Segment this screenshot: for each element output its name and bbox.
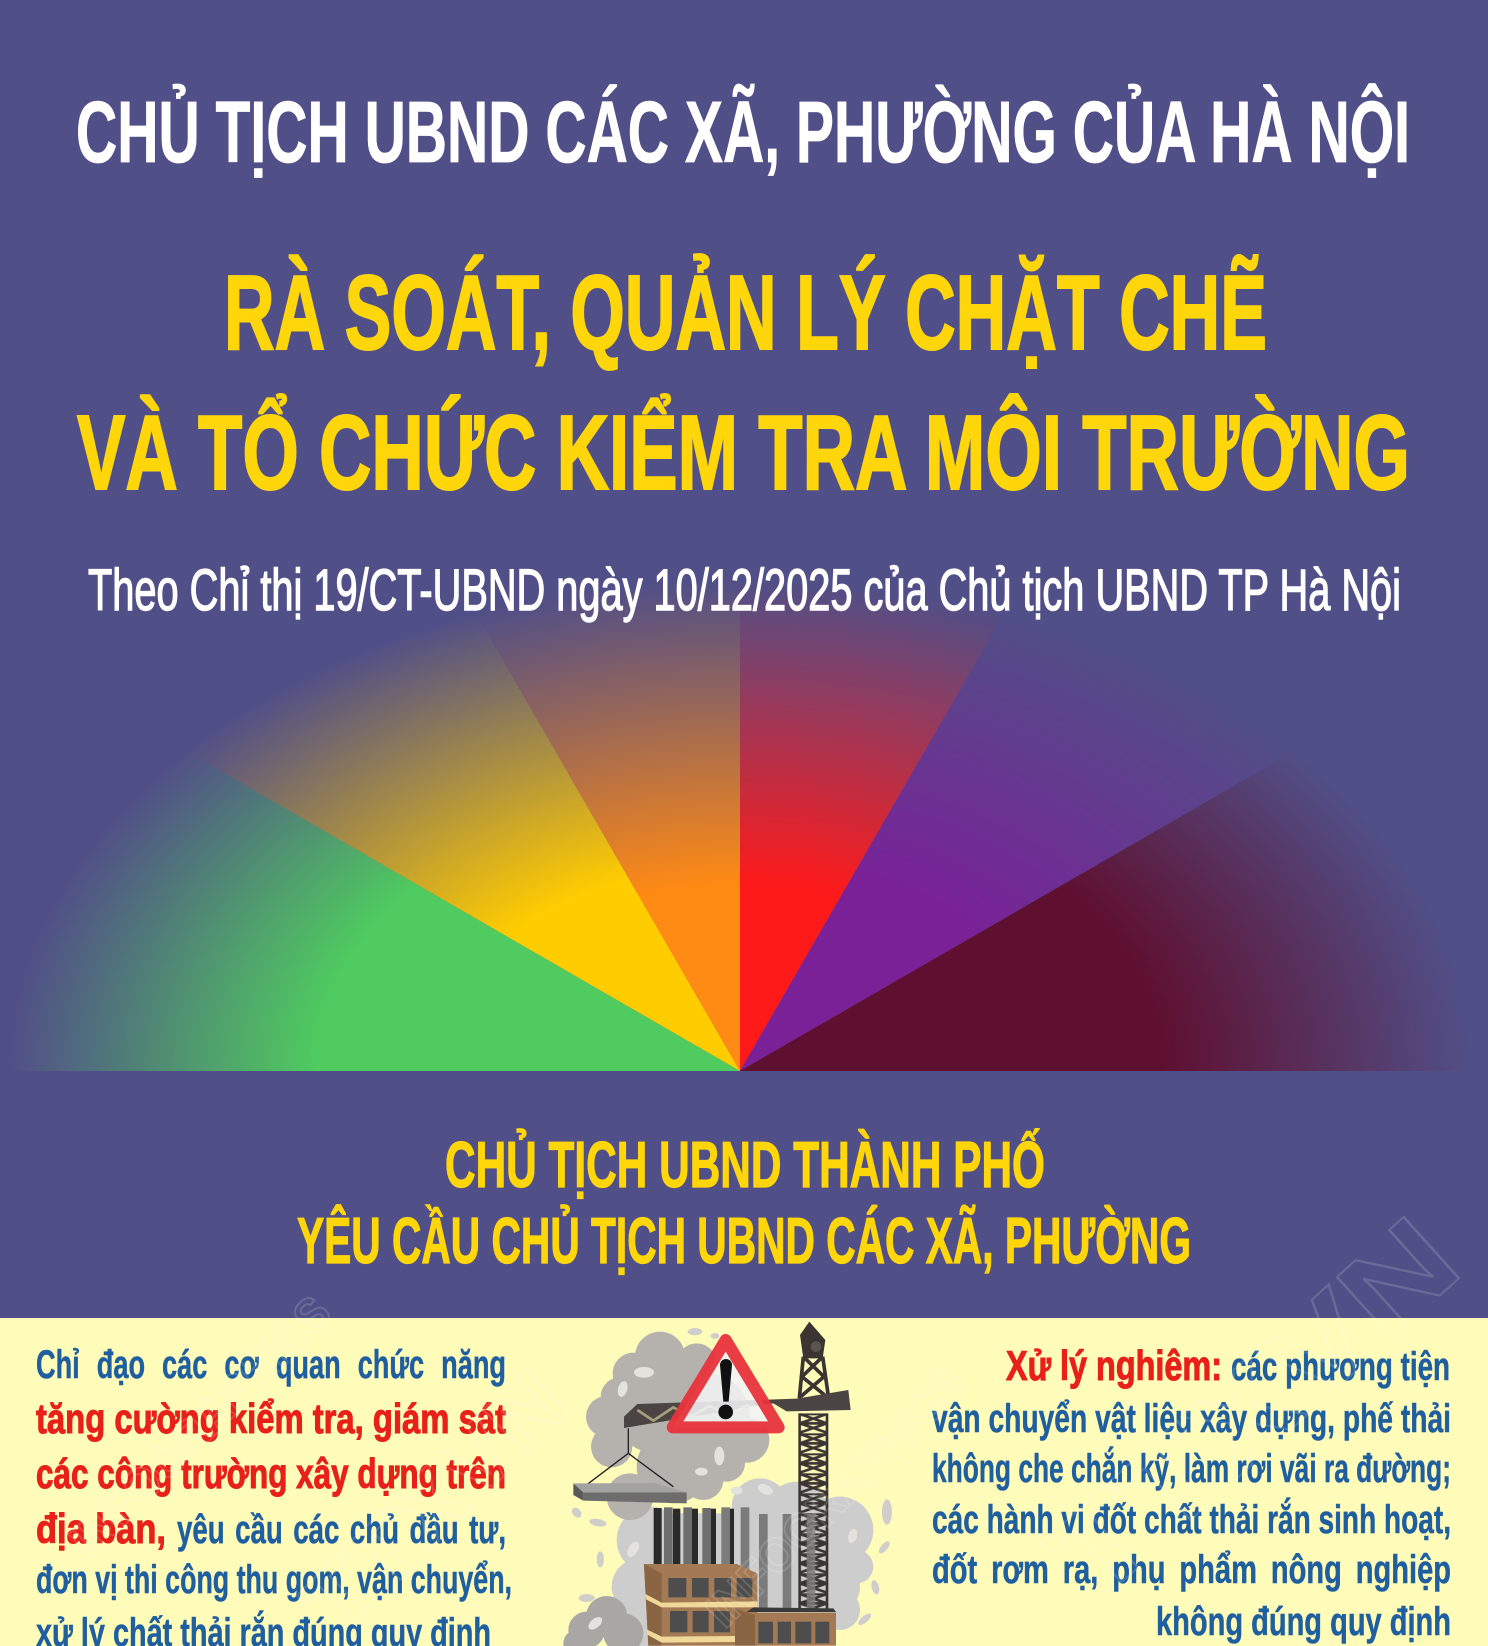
panel: pale yellow content area bbox=[0, 1318, 1488, 1646]
text block: left column: các công trường xây dựng trên bbox=[36, 1450, 506, 1497]
watermark: TTXVN bbox=[283, 1350, 587, 1646]
section heading bbox=[297, 1128, 1191, 1277]
crane: lattice mast and jib bbox=[624, 1322, 851, 1612]
icon: warning triangle bbox=[673, 1340, 779, 1427]
wedge: green bbox=[0, 571, 740, 1071]
wedge: purple bbox=[740, 205, 1488, 1071]
text block: left column: Chỉ đạo các cơ quan chức năng bbox=[36, 1343, 506, 1387]
wedge: yellow bbox=[0, 205, 740, 1071]
smoke: dark cloud bbox=[586, 1332, 769, 1520]
text block: right column bbox=[932, 1342, 1451, 1644]
building: rebar columns bbox=[654, 1507, 791, 1612]
watermark: INFOGRAPHICS bbox=[695, 1356, 977, 1638]
smoke: light cloud bbox=[612, 1478, 873, 1646]
watermark: INFOGRAPHICS bbox=[60, 1286, 342, 1568]
colour fan chart bbox=[0, 71, 1488, 1071]
text block: left column: đơn vị thi công thu gom, vận chuyển, bbox=[36, 1558, 512, 1602]
smoke: bottom left cloud bbox=[563, 1596, 643, 1646]
main heading bbox=[77, 253, 1410, 512]
wedge: maroon bbox=[740, 571, 1488, 1071]
watermark: TTXVN bbox=[1023, 1191, 1484, 1625]
text block: left column bbox=[36, 1343, 512, 1646]
wedge: orange bbox=[240, 71, 740, 1071]
text block: left column: yêu cầu các chủ đầu tư, bbox=[177, 1508, 506, 1552]
text block: left column: địa bàn, bbox=[36, 1505, 166, 1552]
wedge: red bbox=[740, 71, 1240, 1071]
text block: right column: Xử lý nghiêm: bbox=[1006, 1342, 1222, 1389]
building: right block bbox=[735, 1607, 836, 1646]
watermark bbox=[60, 1191, 1484, 1646]
illustration: construction site with warning sign bbox=[563, 1322, 892, 1646]
text block: left column: tăng cường kiểm tra, giám sát bbox=[36, 1395, 506, 1442]
building: left tower bbox=[644, 1564, 757, 1646]
crane: hook lines and concrete slab bbox=[573, 1428, 687, 1503]
section heading: CHỦ TỊCH UBND THÀNH PHỐ bbox=[445, 1128, 1045, 1201]
smoke puffs bbox=[586, 1367, 859, 1632]
